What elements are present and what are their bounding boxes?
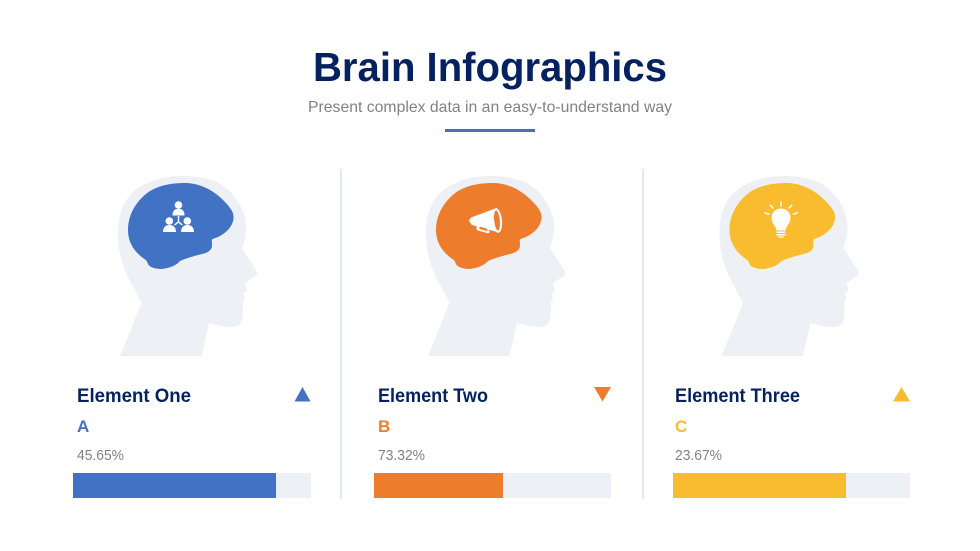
panel: element three — [673, 176, 910, 498]
progress bar two — [374, 473, 611, 498]
title underline — [445, 129, 535, 132]
heading three: Element Three — [675, 386, 800, 407]
letter B: B — [378, 417, 390, 436]
progress bar one — [73, 473, 311, 498]
panel: element one — [73, 176, 311, 498]
heading one: Element One — [77, 386, 191, 407]
icon: people network — [163, 201, 194, 232]
letter A: A — [77, 417, 89, 436]
value one: 45.65% — [77, 448, 124, 464]
head silhouette two — [426, 176, 565, 356]
value three: 23.67% — [675, 448, 722, 464]
letter C: C — [675, 417, 687, 436]
head silhouette one — [118, 176, 257, 356]
brain three — [730, 183, 835, 269]
value two: 73.32% — [378, 448, 425, 464]
up triangle one — [294, 387, 310, 402]
progress bar three — [673, 473, 910, 498]
icon: megaphone — [469, 208, 503, 233]
column divider left — [340, 169, 342, 499]
brain two — [436, 183, 542, 269]
icon: light bulb — [764, 202, 798, 238]
title: Brain Infographics — [313, 44, 667, 90]
panel: element two — [374, 176, 611, 498]
column divider right — [642, 169, 644, 499]
up triangle three — [893, 387, 910, 402]
subtitle: Present complex data in an easy-to-understand way — [308, 99, 672, 116]
down triangle two — [594, 387, 611, 402]
brain one — [128, 183, 234, 269]
head silhouette three — [720, 176, 859, 356]
heading two: Element Two — [378, 386, 488, 407]
